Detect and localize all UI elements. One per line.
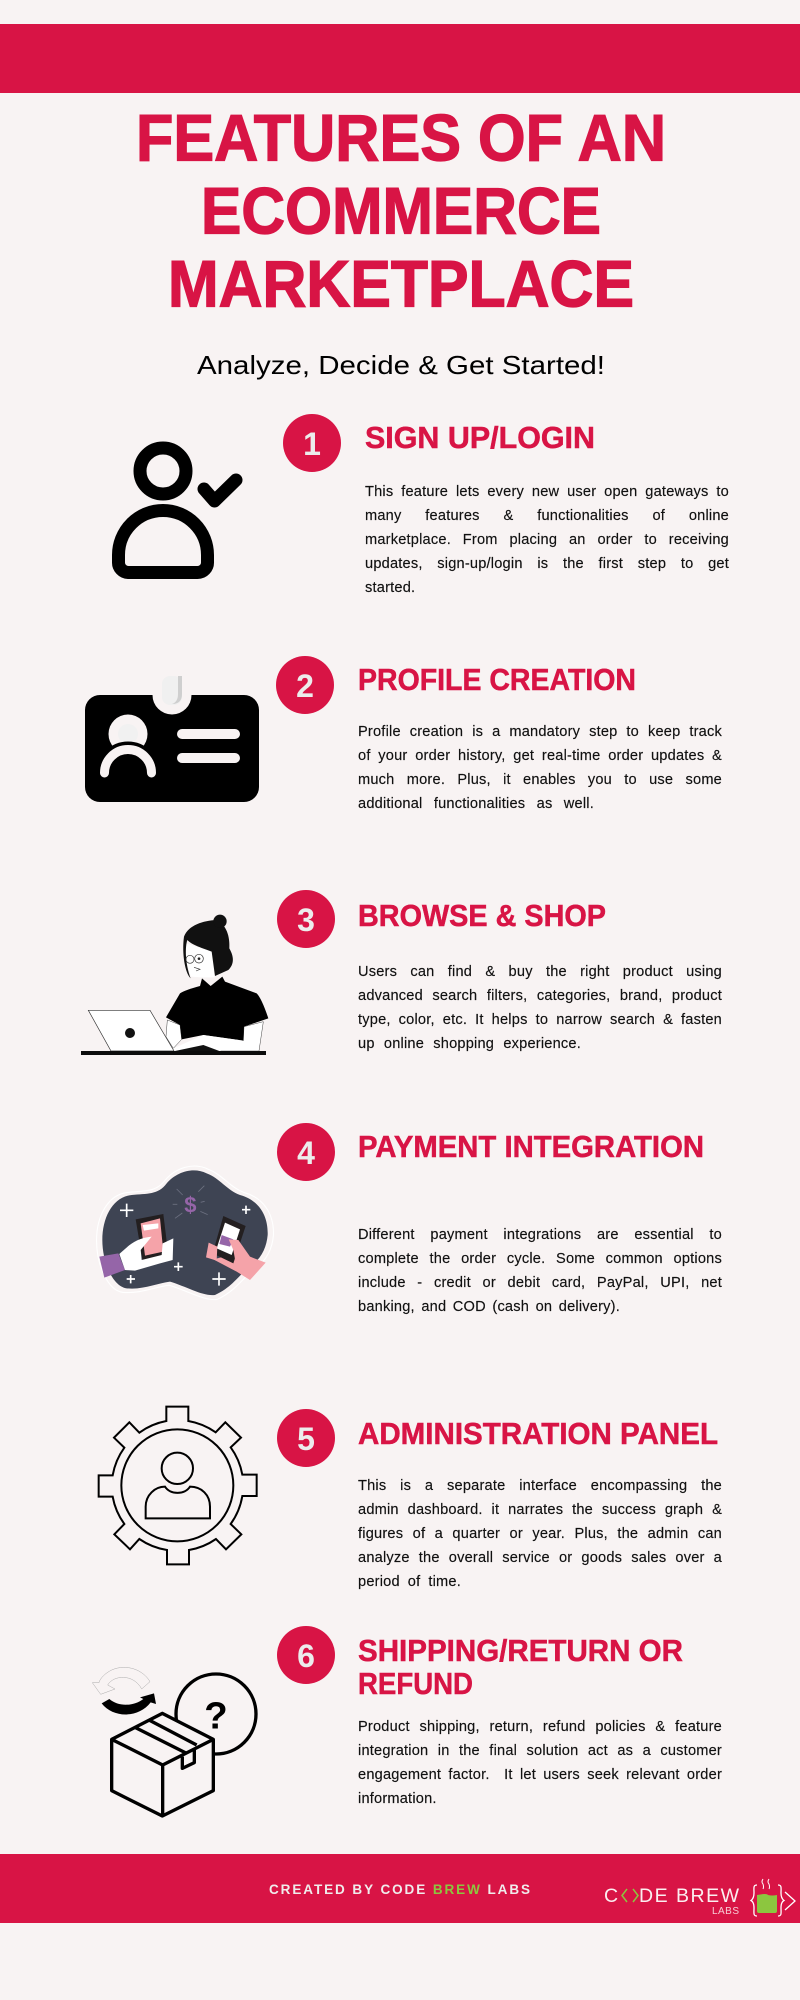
- heading: BROWSE & SHOP: [358, 899, 606, 933]
- logo: Code Brew Labs: C: [604, 1885, 618, 1907]
- number badge 3: 3: [297, 902, 315, 938]
- description: [365, 484, 729, 596]
- description: This feature lets every new user open gateways to: [365, 484, 729, 500]
- description: marketplace. From placing an order to receiving: [365, 532, 729, 548]
- heading: SHIPPING/RETURN OR: [358, 1634, 683, 1668]
- title: FEATURES OF AN: [136, 100, 666, 174]
- credit line: CREATED BY CODE BREW LABS: [269, 1882, 530, 1897]
- description: period of time.: [358, 1574, 461, 1590]
- subtitle: Analyze, Decide & Get Started!: [197, 350, 605, 380]
- description: Different payment integrations are essential to: [358, 1227, 722, 1243]
- number badge 1: 1: [303, 426, 321, 462]
- logo: Code Brew Labs: [604, 1879, 795, 1917]
- description: engagement factor. It let users seek relevant order: [358, 1767, 722, 1783]
- heading: [358, 1634, 683, 1701]
- panel: browse & shop: [81, 890, 722, 1055]
- number badge 2: 2: [296, 668, 314, 704]
- description: integration in the final solution act as a customer: [358, 1743, 722, 1759]
- description: [358, 1719, 722, 1807]
- number badge 3: [277, 890, 335, 948]
- footer banner: [0, 1854, 800, 1923]
- number badge 6: [277, 1626, 335, 1684]
- description: [358, 1227, 722, 1315]
- description: advanced search filters, categories, brand, product: [358, 988, 722, 1004]
- icon: parcel box with question mark and arrows: [92, 1667, 256, 1816]
- description: Product shipping, return, refund policies & feature: [358, 1719, 722, 1735]
- description: information.: [358, 1791, 437, 1807]
- description: started.: [365, 580, 415, 596]
- description: analyze the overall service or goods sales over a: [358, 1550, 722, 1566]
- number badge 5: [277, 1409, 335, 1467]
- description: Users can find & buy the right product using: [358, 964, 722, 980]
- description: of your order history, get real-time order updates &: [358, 748, 722, 764]
- panel: administration panel: [98, 1406, 722, 1590]
- icon: id card: [85, 676, 259, 802]
- description: [358, 964, 722, 1052]
- title: MARKETPLACE: [168, 246, 634, 320]
- description: include - credit or debit card, PayPal, UPI, net: [358, 1275, 722, 1291]
- icon: phones payment illustration: [97, 1166, 273, 1300]
- description: This is a separate interface encompassing the: [358, 1478, 722, 1494]
- heading: ADMINISTRATION PANEL: [358, 1417, 718, 1451]
- panel: shipping/return or refund: [92, 1626, 722, 1818]
- number badge 5: 5: [297, 1421, 315, 1457]
- heading: PAYMENT INTEGRATION: [358, 1130, 704, 1164]
- logo: Code Brew Labs: DE BREW: [639, 1885, 740, 1907]
- description: [358, 724, 722, 812]
- number badge 4: [277, 1123, 335, 1181]
- description: additional functionalities as well.: [358, 796, 594, 812]
- logo: Code Brew Labs: LABS: [712, 1906, 739, 1917]
- description: admin dashboard. it narrates the success graph &: [358, 1502, 722, 1518]
- description: updates, sign-up/login is the first step to get: [365, 556, 729, 572]
- icon: gear with user: [99, 1407, 257, 1564]
- heading: PROFILE CREATION: [358, 663, 636, 697]
- description: complete the order cycle. Some common options: [358, 1251, 722, 1267]
- description: figures of a quarter or year. Plus, the admin can: [358, 1526, 722, 1542]
- panel: profile creation: [85, 656, 722, 812]
- description: banking, and COD (cash on delivery).: [358, 1299, 620, 1315]
- description: much more. Plus, it enables you to use some: [358, 772, 722, 788]
- description: up online shopping experience.: [358, 1036, 581, 1052]
- description: many features & functionalities of online: [365, 508, 729, 524]
- icon: user with check mark: [118, 448, 236, 572]
- panel: sign up/login: [112, 414, 729, 596]
- heading: SIGN UP/LOGIN: [365, 421, 595, 455]
- number badge 6: 6: [297, 1638, 315, 1674]
- number badge 1: [283, 414, 341, 472]
- icon: phones payment illustration: $: [184, 1192, 196, 1217]
- number badge 4: 4: [297, 1135, 315, 1171]
- heading: REFUND: [358, 1667, 473, 1701]
- panel: payment integration: [96, 1123, 722, 1315]
- title: [136, 100, 666, 380]
- description: type, color, etc. It helps to narrow search & fasten: [358, 1012, 722, 1028]
- number badge 2: [276, 656, 334, 714]
- icon: woman at laptop: [81, 915, 268, 1055]
- description: [358, 1478, 722, 1590]
- top banner: [0, 24, 800, 93]
- description: Profile creation is a mandatory step to keep track: [358, 724, 722, 740]
- title: ECOMMERCE: [201, 174, 601, 248]
- icon: parcel box with question mark and arrows: ?: [204, 1694, 228, 1737]
